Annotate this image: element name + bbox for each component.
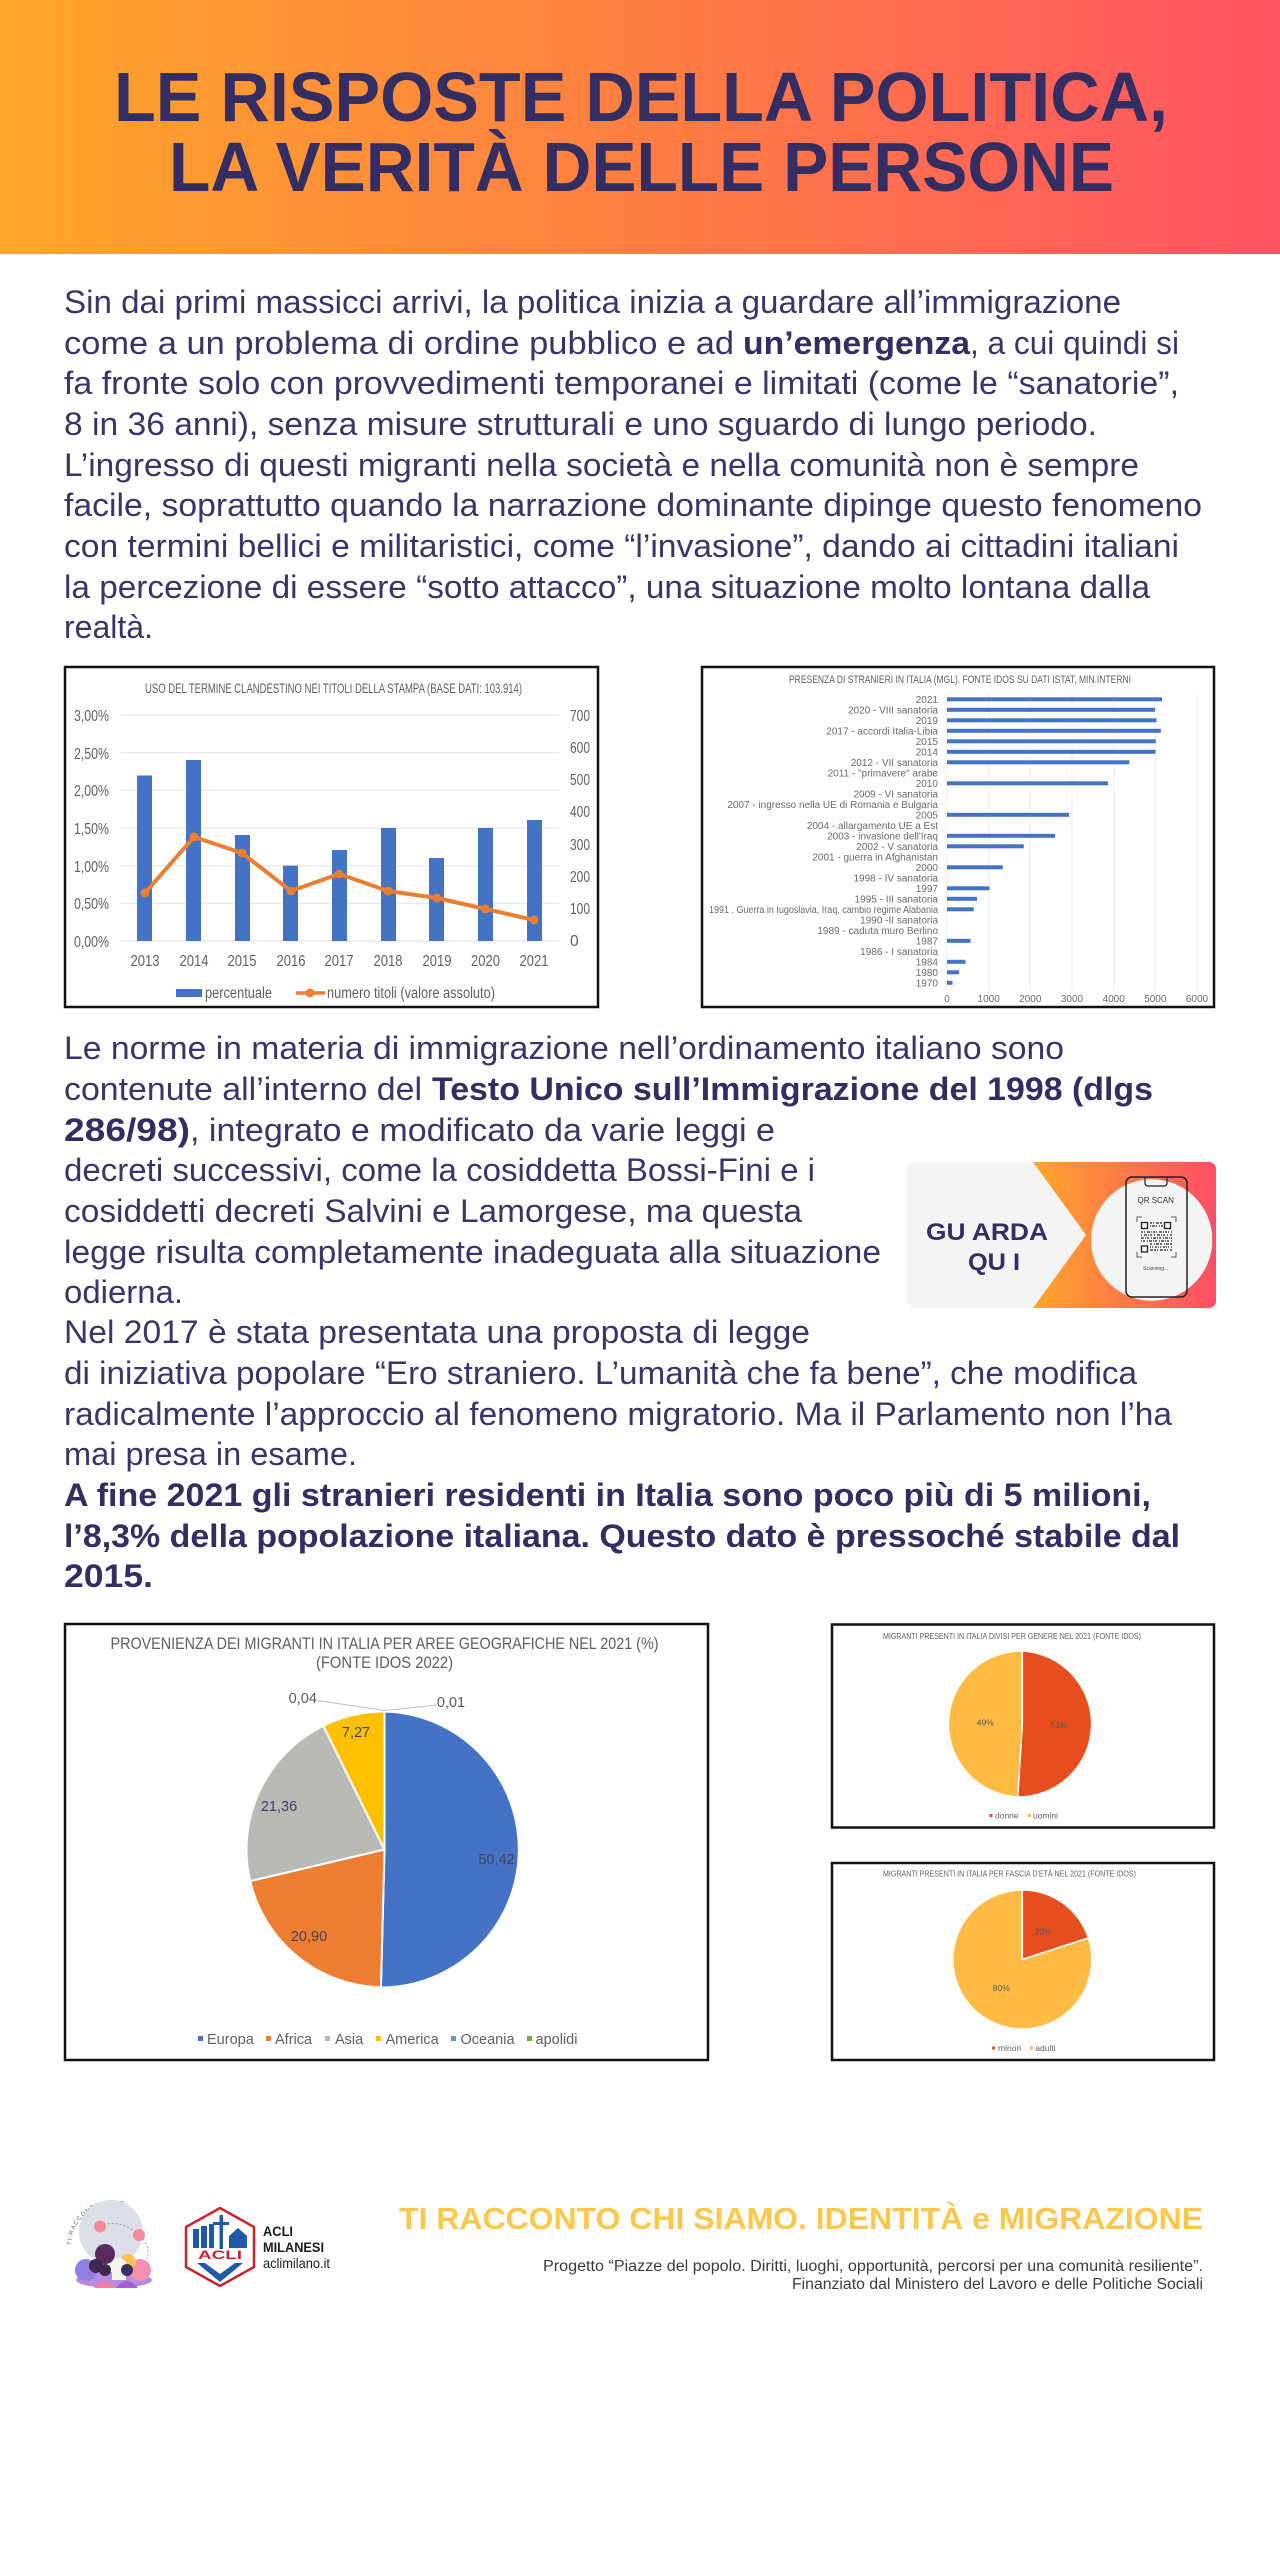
data labels: 21,36 bbox=[261, 1799, 297, 1815]
chart title: MIGRANTI PRESENTI IN ITALIA DIVISI PER GENERE NEL 2021 (FONTE IDOS) bbox=[883, 1631, 1141, 1641]
legend bbox=[990, 1810, 1058, 1820]
category labels: 1980 bbox=[916, 968, 938, 979]
text block: norme: contenute all’interno del bbox=[64, 1071, 422, 1107]
leader lines bbox=[318, 1700, 437, 1710]
icon: project logo illustration: TI RACCONTO CHI SIAMO bbox=[66, 2200, 124, 2245]
bars: percentuale bbox=[137, 760, 542, 941]
text block: key figure: 2015. bbox=[64, 1558, 153, 1594]
text block: norme: decreti successivi, come la cosiddetta Bossi-Fini e i bbox=[64, 1152, 815, 1188]
legend: percentuale bbox=[205, 985, 272, 1002]
category labels: 1986 - I sanatoria bbox=[860, 947, 938, 958]
text block: norme: cosiddetti decreti Salvini e Lamorgese, ma questa bbox=[64, 1193, 802, 1229]
gridlines and value axis: 0 bbox=[944, 994, 950, 1005]
title: LE RISPOSTE DELLA POLITICA, bbox=[114, 58, 1168, 136]
category labels: 1990 -II sanatoria bbox=[860, 916, 938, 926]
category labels: 2010 bbox=[916, 779, 938, 790]
data labels: 50,42 bbox=[478, 1852, 515, 1868]
legend bbox=[176, 985, 495, 1002]
gridlines and axes: 0,00% bbox=[74, 934, 109, 951]
gridlines and axes: 0 bbox=[570, 933, 579, 950]
category labels: 2007 - ingresso nella UE di Romania e Bulgaria bbox=[727, 800, 938, 811]
ACLI wordmark: MILANESI bbox=[263, 2239, 324, 2255]
title bbox=[114, 58, 1168, 206]
bars bbox=[947, 697, 1162, 985]
text block: intro: la percezione di essere “sotto attacco”, una situazione molto lontana dalla bbox=[64, 569, 1150, 605]
ACLI wordmark: ACLI bbox=[263, 2223, 293, 2239]
text block: key figure: A fine 2021 gli stranieri residenti in Italia sono poco più di 5 milioni, bbox=[64, 1477, 1151, 1513]
text block: norme: Le norme in materia di immigrazione nell’ordinamento italiano sono bbox=[64, 1030, 1064, 1066]
text block: intro: , a cui quindi si bbox=[970, 325, 1179, 361]
gridlines and value axis: 4000 bbox=[1103, 994, 1125, 1005]
text block: intro bbox=[64, 284, 1202, 645]
panel: bar and line chart, clandestino bbox=[65, 667, 598, 1007]
legend bbox=[198, 2032, 577, 2048]
gridlines and value axis: 1000 bbox=[978, 994, 1000, 1005]
gridlines and axes: 2020 bbox=[471, 953, 500, 970]
legend: numero titoli (valore assoluto) bbox=[327, 985, 495, 1002]
category labels: 2009 - VI sanatoria bbox=[854, 790, 938, 800]
text block: norme: radicalmente l’approccio al fenomeno migratorio. Ma il Parlamento non l’ha bbox=[64, 1396, 1172, 1432]
panel: pie chart, genere bbox=[832, 1624, 1214, 1828]
text block: intro: L’ingresso di questi migranti nella società e nella comunità non è sempre bbox=[64, 447, 1139, 483]
legend: Europa bbox=[207, 2032, 255, 2048]
gridlines and axes: 0,50% bbox=[74, 896, 109, 913]
header banner bbox=[0, 0, 1280, 254]
text block: intro: fa fronte solo con provvedimenti temporanei e limitati (come le “sanatorie”, bbox=[64, 365, 1179, 401]
category labels: 2021 bbox=[916, 695, 938, 706]
gridlines and axes: 2014 bbox=[180, 953, 209, 970]
category labels: 2014 bbox=[916, 748, 938, 758]
text block: intro: Sin dai primi massicci arrivi, la politica inizia a guardare all’immigrazione bbox=[64, 284, 1121, 320]
data labels: 7,27 bbox=[342, 1725, 370, 1741]
category labels: 2015 bbox=[916, 737, 938, 748]
icon: ACLI logo bbox=[186, 2208, 254, 2286]
callout text bbox=[926, 1219, 1048, 1276]
footer credits: Progetto “Piazze del popolo. Diritti, luoghi, opportunità, percorsi per una comunità resiliente”. bbox=[543, 2258, 1203, 2275]
gridlines and axes: 2,50% bbox=[74, 746, 109, 763]
text block: norme: mai presa in esame. bbox=[64, 1436, 357, 1472]
category labels: 2001 - guerra in Afghanistan bbox=[812, 852, 938, 864]
gridlines and axes: 500 bbox=[570, 772, 590, 789]
text block: norme: Nel 2017 è stata presentata una proposta di legge bbox=[64, 1314, 810, 1350]
data labels: 20% bbox=[1034, 1926, 1052, 1936]
gridlines and value axis bbox=[944, 693, 1209, 1005]
text block: norme: legge risulta completamente inadeguata alla situazione bbox=[64, 1234, 881, 1270]
chart title: USO DEL TERMINE CLANDESTINO NEI TITOLI DELLA STAMPA (BASE DATI: 103.914) bbox=[145, 680, 522, 696]
chart title: (FONTE IDOS 2022) bbox=[316, 1654, 453, 1672]
data labels bbox=[993, 1926, 1052, 1993]
data labels: 49% bbox=[977, 1718, 994, 1728]
category labels: 2004 - allargamento UE a Est bbox=[807, 821, 938, 832]
ACLI wordmark: aclimilano.it bbox=[263, 2255, 330, 2271]
callout text: QU I bbox=[968, 1249, 1020, 1276]
legend: Africa bbox=[275, 2032, 313, 2048]
category labels: 2012 - VII sanatoria bbox=[851, 758, 938, 769]
chart title: MIGRANTI PRESENTI IN ITALIA PER FASCIA D'ETÀ NEL 2021 (FONTE IDOS) bbox=[883, 1868, 1136, 1878]
gridlines and axes: 600 bbox=[570, 740, 590, 757]
category labels: 1989 - caduta muro Berlino bbox=[817, 926, 938, 937]
category labels: 2003 - invasione dell'Iraq bbox=[827, 832, 938, 842]
text block: key figure: l’8,3% della popolazione italiana. Questo dato è pressoché stabile dal bbox=[64, 1518, 1180, 1554]
gridlines and value axis: 2000 bbox=[1019, 994, 1042, 1005]
text block: norme: di iniziativa popolare “Ero straniero. L’umanità che fa bene”, che modifica bbox=[64, 1355, 1137, 1391]
legend: Asia bbox=[335, 2032, 364, 2048]
gridlines and axes: 2017 bbox=[324, 953, 354, 970]
icon: ACLI logo: ACLI bbox=[198, 2248, 242, 2262]
legend: minori bbox=[998, 2043, 1021, 2053]
gradient arrow area bbox=[1033, 1162, 1216, 1308]
icon: phone with QR scan: Scanning... bbox=[1143, 1266, 1168, 1272]
gridlines and value axis: 3000 bbox=[1061, 994, 1084, 1005]
text block: intro: facile, soprattutto quando la narrazione dominante dipinge questo fenomeno bbox=[64, 487, 1202, 523]
gridlines and axes: 2019 bbox=[422, 953, 452, 970]
category labels: 2002 - V sanatoria bbox=[856, 842, 938, 853]
data labels: 20,90 bbox=[291, 1929, 327, 1945]
category labels: 1998 - IV sanatoria bbox=[854, 874, 938, 884]
category labels: 1995 - III sanatoria bbox=[855, 894, 938, 906]
footer credits bbox=[543, 2258, 1203, 2293]
callout: QR code card bbox=[907, 1162, 1216, 1308]
data labels: 51% bbox=[1050, 1720, 1068, 1730]
chart title: PRESENZA DI STRANIERI IN ITALIA (MGL). FONTE IDOS SU DATI ISTAT, MIN.INTERNI bbox=[789, 674, 1131, 686]
gridlines and axes: 300 bbox=[570, 837, 590, 854]
category labels: 1987 bbox=[916, 936, 938, 948]
icon: project logo illustration bbox=[66, 2200, 152, 2288]
legend bbox=[992, 2043, 1056, 2053]
chart title bbox=[110, 1635, 658, 1672]
category labels: 2000 bbox=[916, 863, 938, 874]
text block: norme: , integrato e modificato da varie leggi e bbox=[190, 1112, 775, 1148]
pie slices bbox=[948, 1651, 1092, 1797]
gridlines and axes: 100 bbox=[570, 901, 590, 918]
gridlines and axes: 2013 bbox=[130, 953, 160, 970]
legend: America bbox=[386, 2032, 440, 2048]
gridlines and axes: 2,00% bbox=[74, 783, 109, 800]
text block: norme: 286/98) bbox=[64, 1112, 190, 1148]
category labels: 2019 bbox=[916, 716, 938, 727]
data labels: 0,04 bbox=[289, 1691, 317, 1707]
gridlines and axes: 3,00% bbox=[74, 708, 109, 725]
ACLI wordmark bbox=[263, 2223, 330, 2271]
callout text: GU ARDA bbox=[926, 1219, 1048, 1246]
text block: intro: 8 in 36 anni), senza misure strutturali e uno sguardo di lungo periodo. bbox=[64, 406, 1097, 442]
line: numero titoli bbox=[140, 832, 538, 924]
category labels: 2011 - "primavere" arabe bbox=[828, 768, 938, 780]
data labels bbox=[261, 1691, 515, 1945]
text block: intro: come a un problema di ordine pubblico e ad bbox=[64, 325, 734, 361]
category labels: 1997 bbox=[916, 884, 938, 895]
title: LA VERITÀ DELLE PERSONE bbox=[169, 128, 1114, 206]
gridlines and axes: 200 bbox=[570, 869, 590, 886]
legend: adulti bbox=[1035, 2043, 1056, 2053]
legend: donne bbox=[995, 1810, 1019, 1820]
footer credits: Finanziato dal Ministero del Lavoro e delle Politiche Sociali bbox=[792, 2276, 1203, 2293]
gridlines and axes: 2021 bbox=[520, 953, 548, 970]
text block: intro: realtà. bbox=[64, 609, 153, 645]
gridlines and axes: 2016 bbox=[276, 953, 306, 970]
text block: norme bbox=[64, 1030, 1172, 1472]
gridlines and axes: 1,50% bbox=[74, 821, 109, 838]
category labels: 2005 bbox=[916, 810, 938, 822]
legend: uomini bbox=[1033, 1810, 1058, 1820]
text block: norme: odierna. bbox=[64, 1274, 183, 1310]
category labels bbox=[709, 695, 938, 990]
chart title: PROVENIENZA DEI MIGRANTI IN ITALIA PER AREE GEOGRAFICHE NEL 2021 (%) bbox=[110, 1635, 658, 1653]
text block: key figure bbox=[64, 1477, 1180, 1594]
pie slices bbox=[247, 1712, 519, 1987]
panel: horizontal bar chart, presenza stranieri bbox=[702, 667, 1214, 1007]
category labels: 2020 - VIII sanatoria bbox=[848, 706, 938, 716]
gridlines and axes: 700 bbox=[570, 708, 590, 725]
gridlines and axes: 1,00% bbox=[74, 859, 109, 876]
legend: Oceania bbox=[460, 2032, 515, 2048]
data labels: 80% bbox=[993, 1983, 1010, 1993]
legend: apolidi bbox=[536, 2032, 577, 2048]
footer heading: TI RACCONTO CHI SIAMO. IDENTITÀ e MIGRAZIONE bbox=[399, 2201, 1203, 2236]
icon: phone with QR scan bbox=[1126, 1177, 1187, 1297]
text block: intro: con termini bellici e militaristici, come “l’invasione”, dando ai cittadini italiani bbox=[64, 528, 1179, 564]
gridlines and axes bbox=[74, 708, 590, 970]
icon: phone with QR scan: QR SCAN bbox=[1137, 1196, 1174, 1205]
gridlines and axes: 2018 bbox=[374, 953, 402, 970]
category labels: 2017 - accordi Italia-Libia bbox=[826, 726, 938, 738]
data labels bbox=[977, 1718, 1068, 1730]
category labels: 1991 . Guerra in Iugoslavia, Iraq, cambio regime Alabania bbox=[709, 905, 938, 916]
data labels: 0,01 bbox=[437, 1695, 465, 1711]
white circle bbox=[1091, 1179, 1212, 1301]
category labels: 1984 bbox=[916, 958, 938, 968]
text block: intro: un’emergenza bbox=[743, 325, 970, 361]
panel: pie chart, eta bbox=[832, 1863, 1214, 2060]
panel: pie chart, provenienza bbox=[65, 1624, 708, 2060]
gridlines and axes: 400 bbox=[570, 804, 590, 821]
category labels: 1970 bbox=[916, 978, 938, 990]
gridlines and value axis: 6000 bbox=[1186, 994, 1209, 1005]
gridlines and value axis: 5000 bbox=[1144, 994, 1167, 1005]
pie slices bbox=[953, 1890, 1092, 2029]
text block: norme: Testo Unico sull’Immigrazione del 1998 (dlgs bbox=[432, 1071, 1153, 1107]
gridlines and axes: 2015 bbox=[228, 953, 256, 970]
